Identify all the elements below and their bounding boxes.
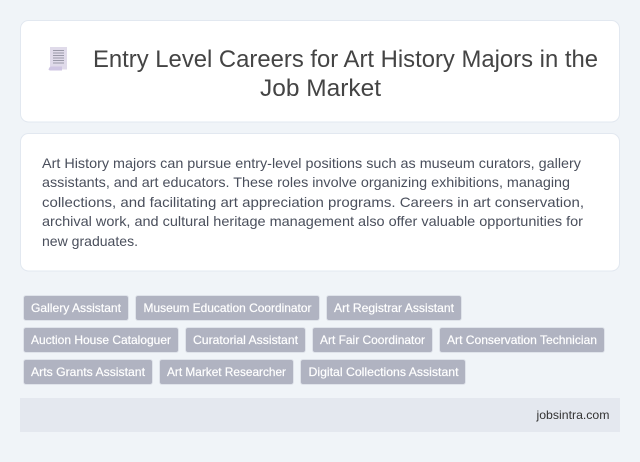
tag list bbox=[24, 296, 604, 384]
tag: Art Market Researcher: Art Market Researcher bbox=[167, 365, 286, 379]
tag: Digital Collections Assistant bbox=[300, 360, 466, 384]
tag: Art Conservation Technician: Art Conservation Technician bbox=[447, 333, 597, 347]
tag: Auction House Cataloguer bbox=[24, 328, 178, 352]
tag: Gallery Assistant bbox=[24, 296, 128, 320]
text block: description: archival work, and cultural heritage management also offer valuable opportunities for bbox=[42, 213, 583, 229]
tag: Art Conservation Technician bbox=[440, 328, 604, 352]
text block: description: collections, and facilitating art appreciation programs. Careers in art conservation, bbox=[42, 194, 584, 210]
text block: description: new graduates. bbox=[42, 233, 138, 249]
tag: Art Market Researcher bbox=[160, 360, 294, 384]
tag: Curatorial Assistant bbox=[186, 328, 306, 352]
footer bbox=[20, 398, 620, 432]
tag: Gallery Assistant: Gallery Assistant bbox=[31, 301, 122, 315]
tag: Arts Grants Assistant bbox=[24, 360, 152, 384]
tag: Art Registrar Assistant: Art Registrar Assistant bbox=[334, 301, 455, 315]
title: Job Market bbox=[260, 75, 381, 102]
footer: jobsintra.com bbox=[535, 408, 610, 422]
panel: header bbox=[20, 20, 620, 122]
text block: description: assistants, and art educators. These roles involve organizing exhibitions, managing bbox=[42, 174, 570, 190]
title: Entry Level Careers for Art History Majors in the bbox=[93, 46, 598, 73]
tag: Auction House Cataloguer: Auction House Cataloguer bbox=[31, 333, 171, 347]
icon: document scroll bbox=[48, 47, 67, 70]
tag: Art Fair Coordinator: Art Fair Coordinator bbox=[320, 333, 425, 347]
tag: Arts Grants Assistant: Arts Grants Assistant bbox=[31, 365, 146, 379]
tag: Museum Education Coordinator bbox=[136, 296, 320, 320]
tag: Digital Collections Assistant: Digital Collections Assistant bbox=[308, 365, 459, 379]
tag: Museum Education Coordinator: Museum Education Coordinator bbox=[144, 301, 312, 315]
text block: description bbox=[42, 155, 584, 249]
panel: description bbox=[20, 134, 620, 271]
title bbox=[93, 46, 598, 102]
tag: Art Fair Coordinator bbox=[312, 328, 432, 352]
text block: description: Art History majors can pursue entry-level positions such as museum curators, gallery bbox=[42, 155, 581, 171]
tag: Curatorial Assistant: Curatorial Assistant bbox=[193, 333, 299, 347]
tag: Art Registrar Assistant bbox=[326, 296, 462, 320]
